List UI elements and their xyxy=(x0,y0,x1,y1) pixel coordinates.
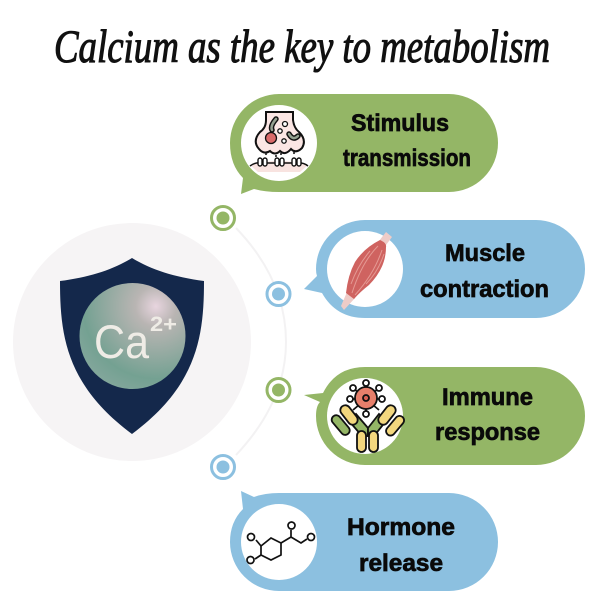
label: contraction xyxy=(420,276,549,303)
label: Immune xyxy=(442,384,533,411)
label: Stimulus xyxy=(351,110,449,137)
speech bubble xyxy=(304,220,585,318)
panel: immune response xyxy=(304,367,585,465)
panel: muscle contraction xyxy=(304,220,585,318)
label xyxy=(435,384,540,446)
icon: molecule xyxy=(241,504,317,580)
label xyxy=(347,514,455,577)
speech bubble xyxy=(230,94,498,194)
label: release xyxy=(359,550,443,577)
icon: antibody and virus xyxy=(327,378,406,454)
marker: blue 2 xyxy=(212,456,234,478)
background circle xyxy=(13,223,251,461)
icon: shield xyxy=(60,258,204,434)
icon: calcium sphere xyxy=(80,283,186,389)
panel: calcium shield xyxy=(13,223,251,461)
speech bubble xyxy=(304,367,585,465)
panel: hormone release xyxy=(230,491,498,591)
label: Hormone xyxy=(347,514,455,541)
marker: green 2 xyxy=(267,378,290,402)
label: response xyxy=(435,419,540,446)
charge label: 2+ xyxy=(150,313,177,336)
label: Muscle xyxy=(445,240,525,267)
speech bubble xyxy=(230,491,498,591)
marker: green 1 xyxy=(212,206,234,230)
calcium label: Ca xyxy=(94,315,150,368)
connecting arc xyxy=(236,228,286,455)
label: transmission xyxy=(343,145,471,172)
label xyxy=(343,110,471,172)
icon: synapse xyxy=(241,105,317,181)
icon: muscle xyxy=(327,231,403,310)
panel: stimulus transmission xyxy=(230,94,498,194)
label xyxy=(420,240,549,303)
marker: blue 1 xyxy=(267,282,290,306)
